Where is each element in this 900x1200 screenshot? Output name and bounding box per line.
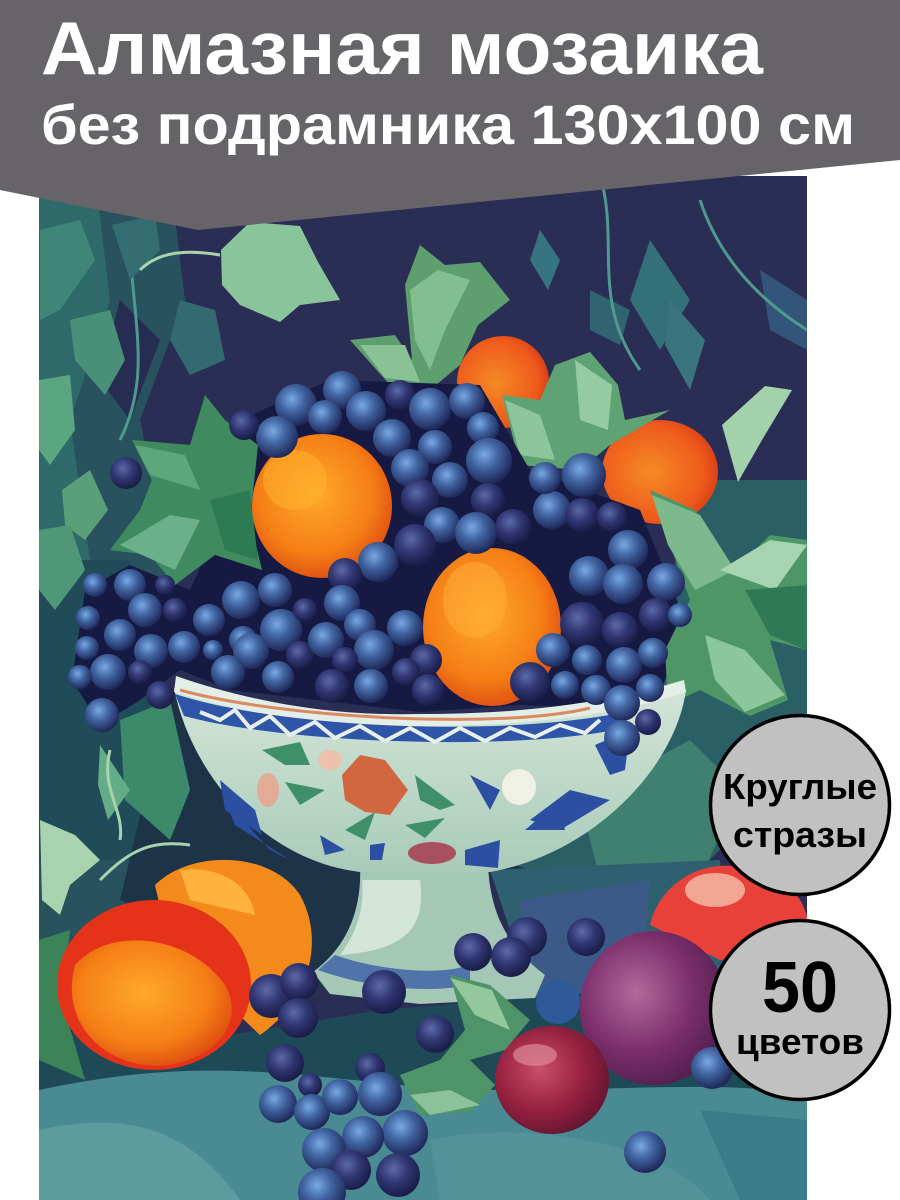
painting background (39, 176, 807, 1200)
badge: 50 colours: 50 (762, 948, 838, 1028)
badge: round rhinestones: стразы (733, 814, 867, 855)
green sprigs on bowl (262, 742, 455, 840)
bowl rim (174, 676, 686, 726)
grape bunch hanging over the rim (581, 674, 664, 756)
pink flower on bowl (408, 842, 456, 864)
plum: large (580, 931, 728, 1085)
leaf: near table (400, 975, 530, 1115)
peach: back lower left (155, 860, 312, 1035)
rim orange line (180, 690, 590, 719)
badge: 50 colours (710, 920, 890, 1100)
peach: main centre (423, 548, 561, 706)
dark mass behind the grapes (72, 380, 685, 725)
peach: front lower left (57, 900, 251, 1070)
apple: right (650, 866, 808, 960)
badge: 50 colours: цветов (736, 1021, 864, 1062)
pedestal blue band (318, 955, 470, 989)
rim blue pattern band (175, 694, 625, 742)
loose grapes on the table (249, 917, 733, 1173)
peach: main upper (252, 434, 392, 578)
grape bunches in the bowl (68, 371, 692, 732)
peach: back right (602, 420, 718, 524)
pedestal highlight (340, 880, 421, 955)
header banner (0, 0, 900, 230)
plum: small (495, 1026, 609, 1134)
painting: fruit bowl still life (39, 176, 808, 1200)
blue floral motifs on bowl (220, 730, 630, 868)
leaf: right cluster (650, 490, 807, 716)
leaf: top centre (350, 245, 510, 390)
badge: round rhinestones: Круглые (723, 766, 877, 807)
bowl body (174, 688, 686, 872)
footed bowl (174, 676, 686, 1004)
flower on bowl (342, 755, 408, 815)
subtitle: без подрамника 130х100 см (41, 93, 855, 156)
title: Алмазная мозаика (41, 6, 764, 90)
badge: round rhinestones (710, 716, 890, 894)
bowl pedestal (313, 865, 545, 1004)
background leaves (39, 215, 792, 1080)
cream flower on bowl (502, 769, 536, 805)
peach: back top (457, 336, 549, 428)
leaf: top right (502, 352, 670, 470)
leaf: left of the bowl fruit (110, 395, 262, 585)
grape bunch on the table (259, 1053, 428, 1200)
